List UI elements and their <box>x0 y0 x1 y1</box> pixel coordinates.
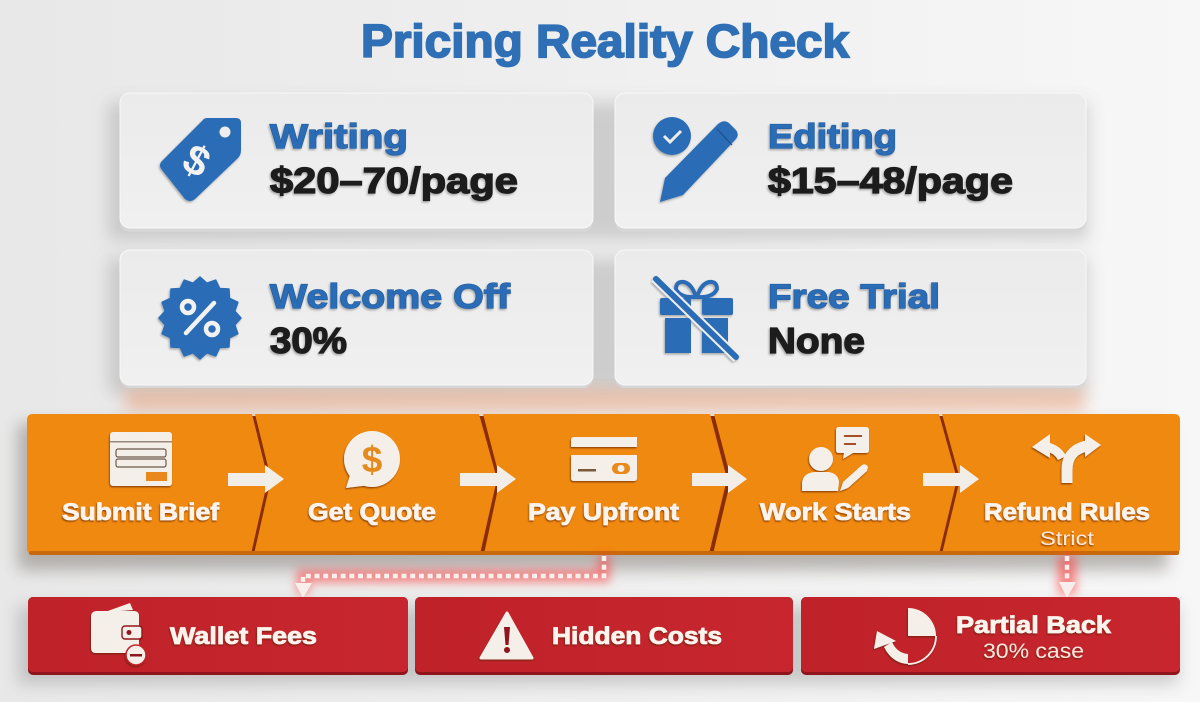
label: hidden costs: Hidden Costs <box>552 623 722 650</box>
arrow: pay to work <box>692 465 747 493</box>
step: pay upfront <box>483 414 727 554</box>
arrow: submit to quote <box>228 465 284 493</box>
icon: wallet with minus <box>91 603 146 665</box>
dotted connector: refund rules to partial back <box>1059 556 1076 598</box>
heading: editing: Editing <box>768 118 897 156</box>
icon: forking arrows <box>1032 434 1101 483</box>
label: get quote: Get Quote <box>308 499 436 526</box>
icon: percent badge <box>159 277 241 359</box>
value: editing rate: $15–48/page <box>768 160 1013 201</box>
icon: crossed gift <box>655 278 737 358</box>
icon: person writing <box>802 427 869 491</box>
icon: price tag: $ <box>175 134 218 187</box>
step: refund rules <box>942 414 1180 554</box>
panel: wallet fees <box>28 597 408 675</box>
label: 30 percent case: 30% case <box>983 640 1084 663</box>
label: wallet fees: Wallet Fees <box>170 623 317 650</box>
icon: form window <box>110 432 172 486</box>
icon: price tag <box>160 118 241 201</box>
arrow: quote to pay <box>460 465 516 493</box>
step: work starts <box>713 414 957 554</box>
arrow: work to refund <box>923 465 979 493</box>
label: refund rules: Refund Rules <box>984 499 1150 526</box>
panel: hidden costs <box>415 597 793 675</box>
icon: dollar speech bubble: $ <box>362 439 383 480</box>
value: writing rate: $20–70/page <box>270 160 518 201</box>
label: pay upfront: Pay Upfront <box>528 499 679 526</box>
process flow: five orange steps <box>27 414 1180 555</box>
label: submit brief: Submit Brief <box>62 499 220 526</box>
icon: dollar speech bubble <box>344 431 400 488</box>
step: get quote <box>254 414 497 554</box>
step: submit brief <box>27 414 268 554</box>
panel: free trial <box>615 250 1086 388</box>
panel: editing price <box>615 93 1086 232</box>
icon: pencil with check <box>653 117 738 202</box>
icon: warning triangle <box>481 613 532 658</box>
value: 30 percent: 30% <box>270 320 347 361</box>
label: strict: Strict <box>1040 529 1095 550</box>
icon: credit card <box>571 437 637 481</box>
dotted connector: pay upfront to wallet fees <box>295 556 604 598</box>
label: work starts: Work Starts <box>760 499 911 526</box>
value: none: None <box>768 320 865 361</box>
label: partial back: Partial Back <box>956 612 1112 639</box>
heading: free trial: Free Trial <box>768 278 940 316</box>
icon: pie with return arrow <box>874 608 936 664</box>
panel: welcome discount <box>120 250 593 388</box>
heading: welcome off: Welcome Off <box>270 278 511 316</box>
panel: partial back <box>801 597 1180 675</box>
panel: writing price <box>120 93 593 232</box>
title: Pricing Reality Check <box>361 15 849 67</box>
heading: writing: Writing <box>270 118 408 156</box>
